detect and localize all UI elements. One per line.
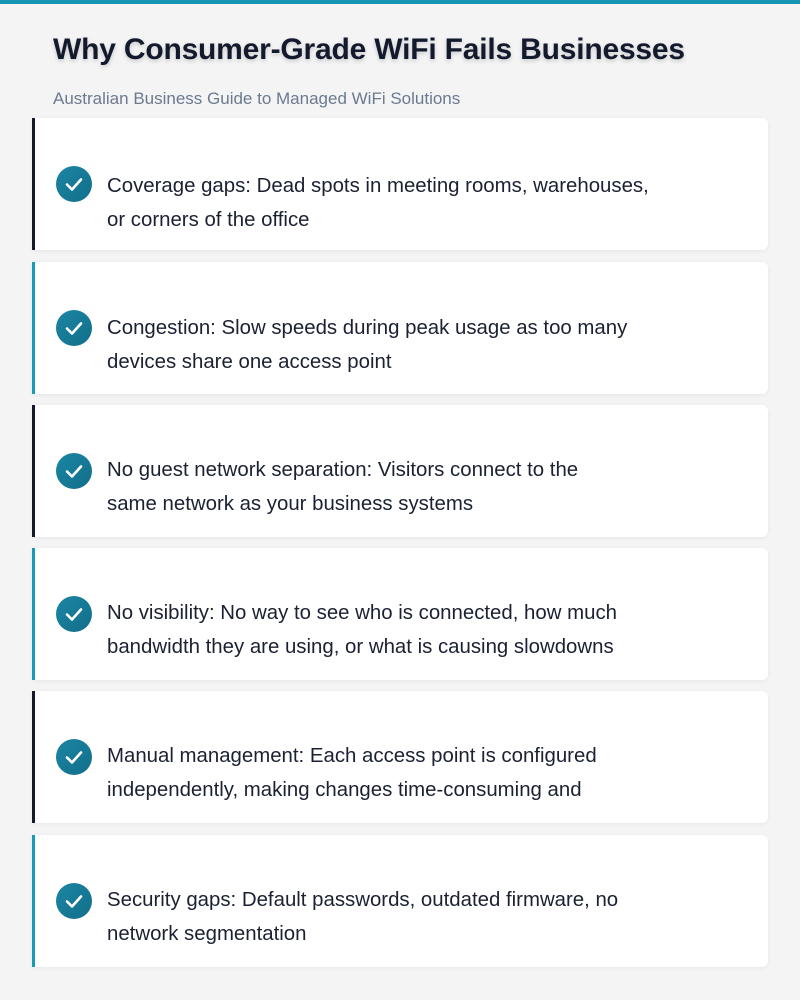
subtitle: Australian Business Guide to Managed WiFi Solutions [53,89,460,108]
text: No visibility: No way to see who is connected, how much [107,602,617,624]
text [107,459,578,515]
text [107,889,618,945]
icon: check [56,453,92,489]
text: or corners of the office [107,209,310,231]
panel: security gaps [32,835,768,967]
text: Security gaps: Default passwords, outdated firmware, no [107,889,618,911]
text [107,175,649,231]
text: Congestion: Slow speeds during peak usage as too many [107,317,627,339]
text [107,745,597,801]
panel: coverage gaps [32,118,768,250]
text: independently, making changes time-consuming and [107,779,582,801]
icon: check [56,739,92,775]
icon: check [56,166,92,202]
panel: visibility [32,548,768,680]
text: network segmentation [107,923,306,945]
icon: check [56,596,92,632]
text: Manual management: Each access point is configured [107,745,597,767]
text: same network as your business systems [107,493,473,515]
panel: congestion [32,262,768,394]
icon: check [56,883,92,919]
text [107,317,628,373]
text: devices share one access point [107,351,392,373]
panel: manual management [32,691,768,823]
icon: check [56,310,92,346]
text: No guest network separation: Visitors connect to the [107,459,578,481]
text [107,602,617,658]
panel: guest network [32,405,768,537]
title: Why Consumer-Grade WiFi Fails Businesses [53,33,685,66]
text: Coverage gaps: Dead spots in meeting rooms, warehouses, [107,175,649,197]
text: bandwidth they are using, or what is causing slowdowns [107,636,614,658]
